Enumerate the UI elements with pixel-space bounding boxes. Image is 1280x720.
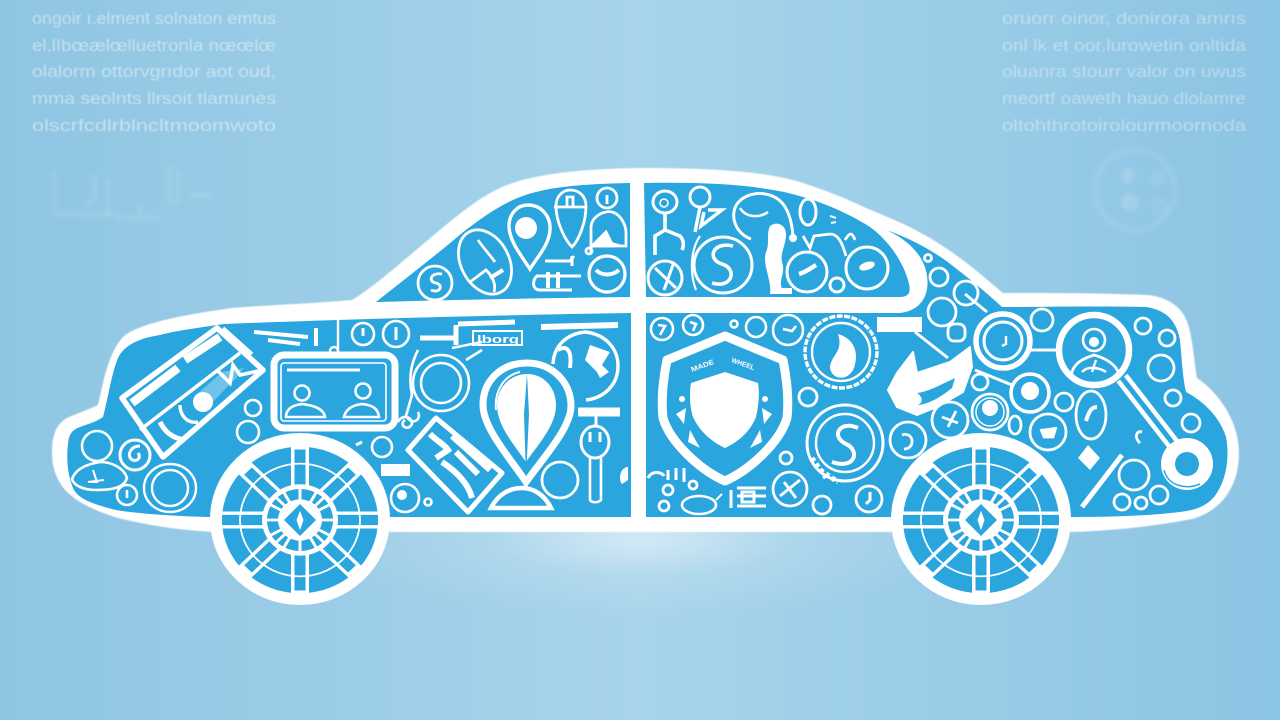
icon: gear ring [805, 316, 877, 388]
faint chart: left [54, 165, 212, 218]
card zigzag [217, 365, 263, 383]
wheel: right [891, 433, 1071, 605]
icon: handle end ring [1161, 438, 1213, 490]
icon: label box: lborg [477, 334, 519, 346]
shield lettering [690, 357, 756, 374]
panel: lower left body [67, 313, 631, 517]
icon: balloon figure [690, 187, 722, 290]
icon: oval circle [846, 247, 888, 289]
icon: ring [928, 298, 956, 326]
card dot [193, 392, 213, 412]
icon: small oval [800, 199, 836, 225]
icon: curved arrow [888, 332, 972, 415]
icon: rounded ring [948, 324, 965, 341]
icon: tiny ring [924, 254, 932, 262]
wheel: left [210, 433, 390, 605]
icon: clock ring [117, 485, 137, 505]
icon: front small marks [648, 468, 722, 514]
card light panel [196, 368, 244, 410]
icon: plain ring [542, 462, 578, 498]
icon: squiggle [803, 234, 855, 256]
icon: magnifier with person [1059, 315, 1129, 385]
icon: magnifier [578, 412, 620, 502]
icon: block [381, 464, 410, 476]
icon: figure with mountain [586, 188, 626, 254]
text block: top right [1002, 9, 1247, 135]
icon: bag [554, 190, 586, 247]
shield lettering: WHEEL [730, 357, 756, 372]
icon: big double ring [976, 314, 1030, 368]
text block: top right: onl lk et oor.lurowetin onltida [1002, 36, 1247, 55]
icon: credit card [122, 328, 263, 457]
icon: antenna [330, 320, 338, 355]
text block: top right: oruorr oinor, donirora amrıs [1002, 9, 1246, 28]
text block: top left: el.lIbœælœlluetronla nœœlœ [32, 36, 276, 55]
icon: label box [420, 322, 522, 346]
text block: top right: meortf oaweth hauo dlolamre [1002, 89, 1246, 108]
line [965, 294, 987, 312]
text block: top right: oltohthrotoirolourmoornoda [1002, 116, 1247, 135]
icon: small machine [534, 256, 581, 290]
connector line [975, 350, 1060, 385]
icon: double ring [144, 464, 196, 512]
icon: small rings left [237, 400, 432, 512]
icon: person at front [72, 431, 127, 490]
icon: small ring [830, 278, 844, 292]
card divider [140, 328, 252, 430]
icon: egg shape [448, 221, 522, 303]
icon: pin base [491, 488, 551, 508]
text block: top right: oluanra stourr valor on uwus [1002, 62, 1246, 81]
text block: top left: mma seolnts llrsoit tlamunes [32, 89, 276, 108]
icon: magnifier handle [1122, 378, 1178, 450]
icon: ring [954, 281, 978, 305]
faint chart: right [1095, 150, 1175, 230]
icon: white figure [765, 224, 792, 294]
text block: top left: olalorm ottorvgrıdor aot oud, [32, 62, 276, 81]
panel: right window [644, 183, 910, 297]
icon: screen with two people [274, 355, 395, 428]
shield lettering: MADE [690, 359, 716, 374]
icons: body rings right [659, 309, 1200, 514]
icon: globe [541, 325, 618, 400]
person right [344, 384, 379, 417]
icon: small box [731, 488, 766, 508]
text block: top left [32, 9, 276, 135]
icons: top row rings [651, 315, 803, 345]
icon: rotated ticket [408, 418, 502, 512]
icons: right window [648, 187, 888, 295]
card stripes [132, 337, 220, 403]
panel: lower right body [646, 230, 1228, 517]
shield ornaments [676, 396, 772, 448]
icon: stick figure with bike [648, 191, 683, 295]
car body silhouette [52, 168, 1239, 532]
icon: yin yang circle [694, 237, 752, 293]
person left [286, 386, 325, 417]
icon: headset ring [406, 342, 482, 421]
icon: swirl circle [418, 266, 452, 300]
icon: bar left top [254, 328, 316, 346]
car illustration [52, 168, 1239, 605]
icon: circle with dash [787, 252, 827, 292]
icon: swirl gear ring [807, 405, 883, 482]
icon: ring [930, 268, 948, 286]
glow beneath car [310, 460, 970, 620]
card squiggles [160, 422, 185, 440]
icon: partial ring [620, 467, 628, 484]
text block: top left: ongoir ı.elment solnaton emtus [32, 9, 276, 28]
icon: map pin [509, 205, 550, 269]
icon: shield [662, 336, 788, 481]
text block: top left: olscrfcdlrblncltmoomwoto [32, 116, 276, 135]
icon: large map pin with compass [483, 363, 571, 482]
icon: big oval with cord [734, 194, 797, 242]
icons: hood circles [924, 254, 987, 341]
icon: diamond and slash [1078, 445, 1122, 507]
card outline [122, 328, 263, 457]
icon: clock rings [352, 321, 409, 347]
icon: smile circle [589, 256, 625, 292]
icon: white block [877, 317, 922, 332]
icons: left window [418, 188, 626, 303]
panel: left window [376, 183, 630, 302]
icon: swirl ring [120, 440, 150, 470]
